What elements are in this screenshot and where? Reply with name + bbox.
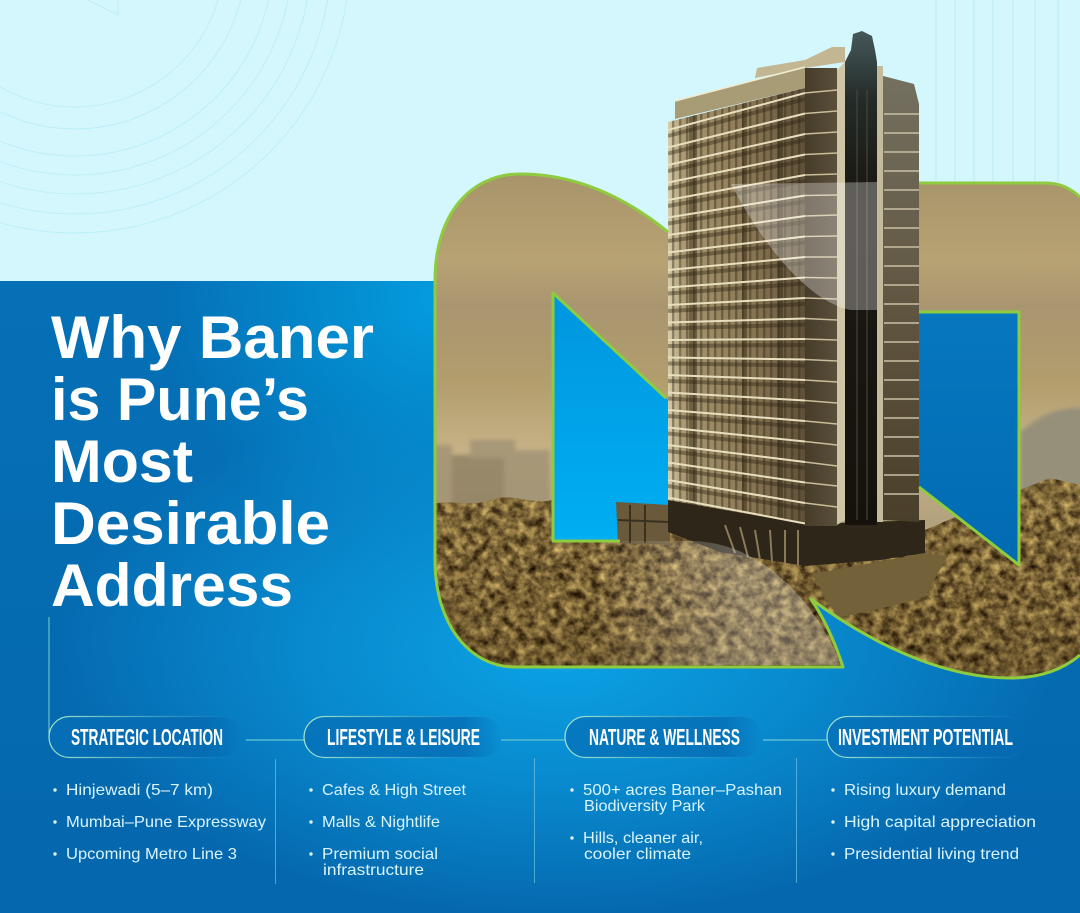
glass core [845, 31, 877, 525]
bullet list: Mumbai–Pune Expressway [66, 814, 266, 831]
pill heading: LIFESTYLE & LEISURE [327, 724, 480, 750]
vertical connector from title [48, 617, 50, 737]
bullet list: Upcoming Metro Line 3 [66, 846, 237, 863]
left facade floor slabs [668, 93, 805, 524]
light columns [837, 62, 845, 525]
right blue window in shape [919, 312, 1019, 565]
bullet list: Presidential living trend [844, 846, 1019, 863]
pill heading [827, 716, 1025, 758]
column 2: lifestyle and leisure [304, 716, 502, 879]
background: blue panel [0, 281, 1080, 913]
bullet list: Premium social [322, 846, 438, 863]
bullet list: cooler climate [584, 846, 691, 863]
column 4: investment potential [827, 716, 1036, 863]
pill heading: STRATEGIC LOCATION [71, 724, 223, 750]
forest canopy [436, 478, 1080, 676]
pill heading: NATURE & WELLNESS [589, 724, 740, 750]
pill heading [565, 716, 763, 758]
bullet list: High capital appreciation [844, 814, 1036, 831]
bullet list [831, 782, 1036, 863]
hazy sky [430, 170, 1080, 550]
lawn [812, 553, 948, 618]
bullet list: infrastructure [323, 862, 424, 879]
title: Desirable [51, 490, 330, 557]
title [51, 304, 374, 619]
bullet list: Cafes & High Street [322, 782, 467, 799]
distant hill and town [1020, 408, 1080, 495]
bullet list: Rising luxury demand [844, 782, 1006, 799]
column 3: nature and wellness [565, 716, 782, 863]
bullet list: Hinjewadi (5–7 km) [66, 782, 213, 799]
glass overlay on tower [731, 182, 877, 310]
left facade [668, 88, 805, 524]
shape outline [435, 174, 1080, 678]
bullet list: Malls & Nightlife [322, 814, 440, 831]
title: Address [51, 552, 293, 619]
tower [616, 31, 925, 566]
right wing [883, 76, 919, 522]
pill heading [49, 716, 243, 758]
pill heading [304, 716, 502, 758]
roof top box [755, 47, 845, 78]
bullet list [53, 782, 266, 863]
bullet list: Hills, cleaner air, [583, 830, 703, 847]
bullet list: Biodiversity Park [584, 798, 706, 815]
bullet list: 500+ acres Baner–Pashan [583, 782, 782, 799]
distant city [436, 439, 551, 504]
title: Why Baner [51, 304, 374, 371]
podium left wing [616, 502, 670, 545]
background: pale sky band [0, 0, 1080, 281]
photo shape: sky, city and forest [430, 170, 1080, 690]
column dividers [276, 758, 796, 884]
decorative concentric arcs [0, 0, 350, 233]
roof parapet [675, 68, 805, 119]
horizontal connectors between pills [246, 739, 827, 741]
bullet list [309, 782, 467, 879]
left blue window in shape [553, 293, 668, 541]
left facade window texture [668, 80, 805, 530]
centre facade [805, 68, 837, 526]
glass overlay on forest [553, 541, 841, 665]
title: is Pune’s [51, 366, 309, 433]
column 1: strategic location [49, 716, 266, 863]
title: Most [51, 428, 193, 495]
decorative vertical lines [936, 0, 1058, 182]
podium base [668, 497, 925, 566]
bullet list [570, 782, 782, 863]
